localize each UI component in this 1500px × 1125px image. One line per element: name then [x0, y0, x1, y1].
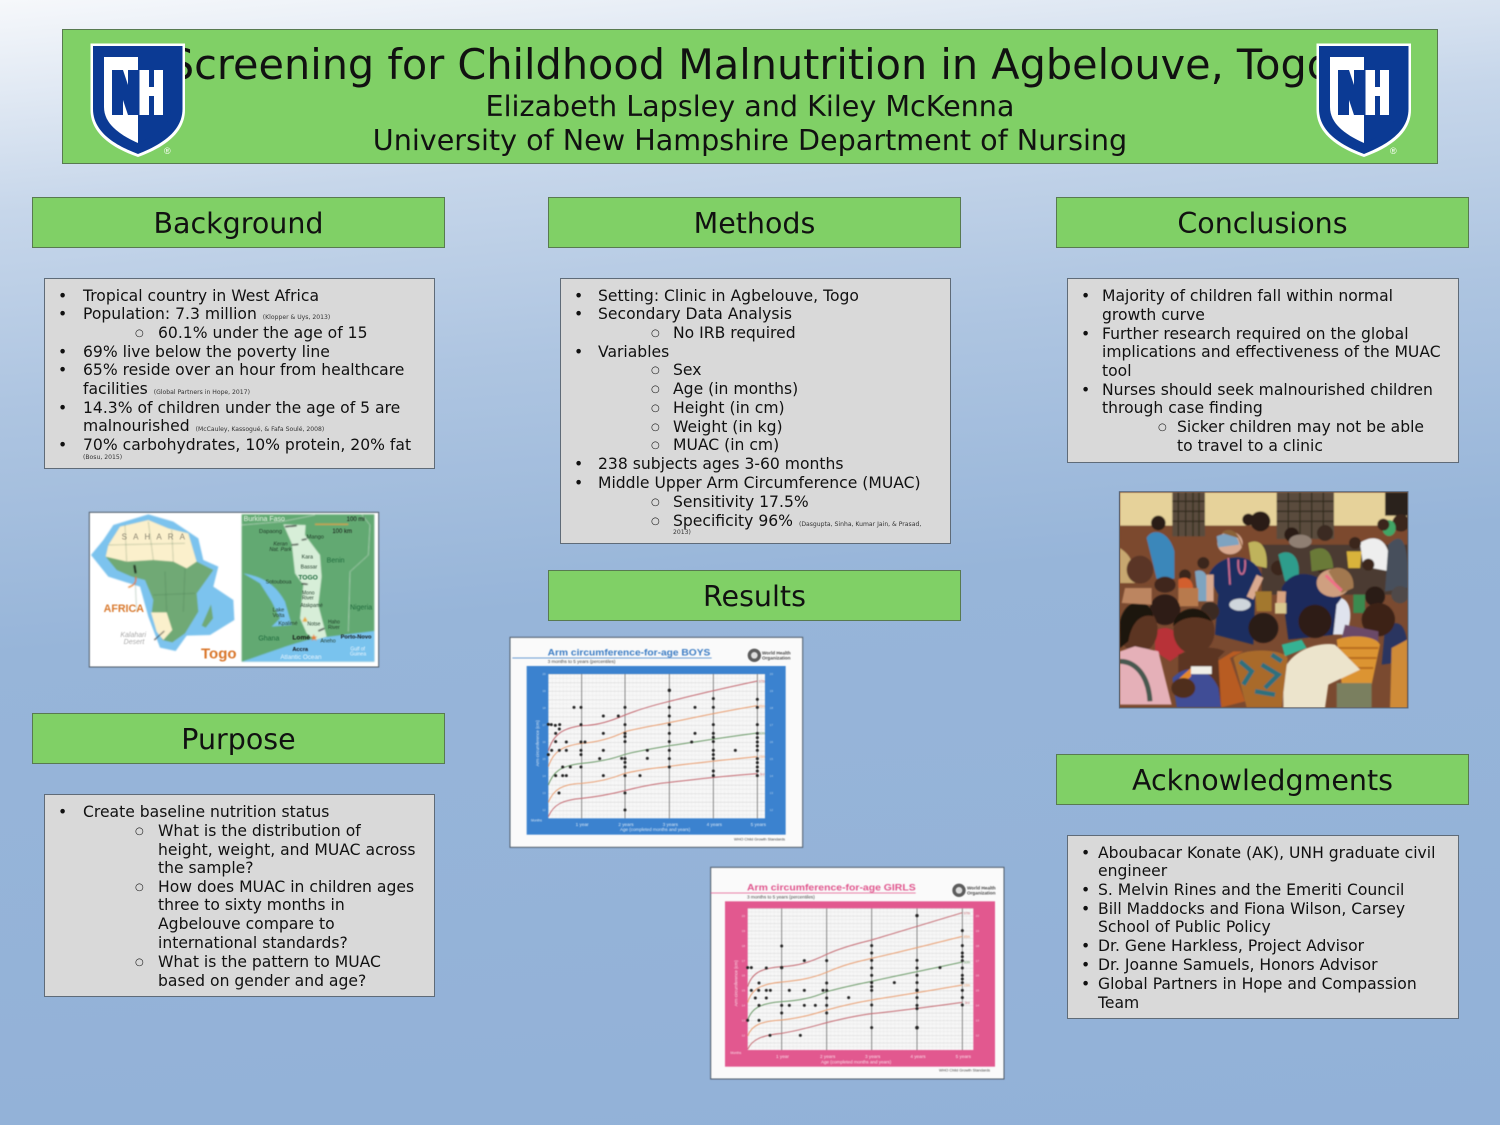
- chart: arm circumference for age, boys: 97th: [759, 680, 765, 684]
- panel: acknowledgments text: Aboubacar Konate (AK), UNH graduate civil: [1098, 844, 1435, 862]
- map labels: Kara: [302, 555, 313, 561]
- chart: arm circumference for age, girls: 14: [976, 1004, 979, 1008]
- icon: UNH shield left: [90, 44, 185, 157]
- panel: methods text: Sensitivity 17.5%: [673, 493, 809, 511]
- heading: Results: Results: [703, 580, 806, 613]
- panel: methods text: Variables: [598, 343, 669, 361]
- heading: Background: [32, 197, 445, 248]
- nurse left: [1208, 557, 1262, 645]
- panel: conclusions text: •: [1081, 325, 1090, 343]
- map labels: Desert: [124, 639, 145, 646]
- chart: arm circumference for age, boys: 13: [770, 791, 773, 795]
- panel: conclusions text: through case finding: [1102, 399, 1263, 417]
- panel: purpose text: the sample?: [158, 859, 254, 877]
- chart: arm circumference for age, girls: 4 years: [910, 1054, 926, 1059]
- panel: acknowledgments text: Global Partners in Hope and Compassion: [1098, 975, 1417, 993]
- header banner: [62, 29, 1438, 164]
- panel: conclusions text: ○: [1158, 422, 1167, 433]
- heading: Conclusions: [1056, 197, 1469, 248]
- chart: arm circumference for age, girls: 17: [742, 959, 745, 963]
- map labels: Mango: [307, 534, 324, 540]
- map labels: SAHARA: [122, 533, 186, 542]
- chart: arm circumference for age, girls: Months: [730, 1051, 742, 1055]
- chart: arm circumference for age, boys: 19: [770, 689, 773, 693]
- panel: acknowledgments text: Dr. Joanne Samuels, Honors Advisor: [1098, 956, 1378, 974]
- icon: UNH shield right: [1316, 44, 1411, 157]
- panel: purpose text: ○: [135, 882, 144, 893]
- chart: arm circumference for age, girls: 12: [742, 1033, 745, 1037]
- chart: arm circumference for age, boys: 18: [542, 706, 546, 710]
- chart: arm circumference for age, boys: 15th: [759, 755, 765, 759]
- heading: Methods: Methods: [694, 207, 815, 240]
- panel: methods text: ○: [651, 328, 660, 339]
- panel: background text: (Bosu, 2015): [83, 454, 122, 461]
- authors: Elizabeth Lapsley and Kiley McKenna: [486, 89, 1014, 123]
- panel: acknowledgments text: [1067, 835, 1459, 1019]
- panel: conclusions text: •: [1081, 287, 1090, 305]
- map labels: Nigeria: [350, 605, 372, 612]
- panel: background text: 60.1% under the age of 15: [158, 324, 368, 342]
- panel: purpose text: •: [58, 803, 67, 821]
- heading: Purpose: [32, 713, 445, 764]
- panel: acknowledgments text: •: [1081, 956, 1090, 974]
- panel: methods text: •: [574, 287, 583, 305]
- panel: background text: Population: 7.3 million (Klopper & Uys, 2013): [83, 305, 330, 323]
- Togo regional map: [242, 514, 374, 662]
- panel: background text: ○: [135, 328, 144, 339]
- chart: arm circumference for age, boys: 3 months to 5 years (percentiles): [548, 659, 616, 664]
- icon: UNH shield right: ®: [1390, 146, 1397, 156]
- chart: arm circumference for age, girls: 13: [976, 1018, 979, 1022]
- panel: purpose text: [44, 794, 435, 997]
- panel: background text: •: [58, 436, 67, 454]
- heading: Conclusions: Conclusions: [1177, 207, 1348, 240]
- chart: arm circumference for age, boys: World Health: [762, 651, 791, 656]
- map labels: AFRICA: [104, 603, 144, 615]
- map labels: Accra: [292, 647, 309, 653]
- chart: arm circumference for age, boys: 17: [770, 723, 773, 727]
- chart: arm circumference for age, boys: Organization: [762, 655, 791, 660]
- background crowd: [1262, 545, 1408, 595]
- heading: Results: [548, 570, 961, 621]
- panel: methods text: Secondary Data Analysis: [598, 305, 792, 323]
- map labels: Gulf of: [350, 646, 366, 652]
- chart: arm circumference for age, boys: 14: [770, 774, 773, 778]
- panel: background text: facilities (Global Partners in Hope, 2017): [83, 380, 250, 398]
- panel: methods text: •: [574, 343, 583, 361]
- sea halo: [91, 514, 234, 651]
- chart: arm circumference for age, boys: Months: [531, 819, 542, 823]
- chart: arm circumference for age, boys: 20: [770, 672, 773, 676]
- chart: arm circumference for age, girls: 17: [976, 959, 979, 963]
- map labels: Aneho: [320, 638, 336, 644]
- chart: arm circumference for age, girls: 85th: [964, 935, 970, 939]
- map labels: 100 km: [332, 529, 352, 535]
- chart: arm circumference for age, boys: WHO Child Growth Standards: [734, 837, 785, 841]
- heading: Acknowledgments: Acknowledgments: [1132, 764, 1393, 797]
- panel: purpose text: three to sixty months in: [158, 896, 345, 914]
- chart: arm circumference for age, boys: 16: [542, 740, 546, 744]
- panel: methods text: ○: [651, 497, 660, 508]
- photo: nurses screening children at the clinic: [1118, 491, 1408, 708]
- chart: arm circumference for age, girls: 50th: [964, 961, 970, 965]
- chart: arm circumference for age, boys: 14: [542, 774, 546, 778]
- panel: methods text: Weight (in kg): [673, 418, 783, 436]
- chart: arm circumference for age, girls: Age (completed months and years): [821, 1059, 892, 1064]
- panel: conclusions text: to travel to a clinic: [1177, 437, 1323, 455]
- panel: methods text: ○: [651, 403, 660, 414]
- panel: acknowledgments text: S. Melvin Rines and the Emeriti Council: [1098, 881, 1404, 899]
- map labels: Mono: [302, 590, 315, 596]
- panel: background text: 69% live below the poverty line: [83, 343, 330, 361]
- chart: arm circumference for age, girls: 13: [742, 1018, 745, 1022]
- map labels: Nat. Park: [269, 547, 292, 553]
- chart: arm circumference for age, boys: 13: [542, 791, 546, 795]
- panel: acknowledgments text: •: [1081, 937, 1090, 955]
- panel: background text: •: [58, 343, 67, 361]
- chart: arm circumference for age, girls: 19: [742, 929, 745, 933]
- chart: arm circumference for age, girls: 3 years: [865, 1054, 881, 1059]
- map labels: Keran: [273, 542, 288, 548]
- chart: arm circumference for age, boys: 4 years: [707, 822, 723, 827]
- panel: acknowledgments text: •: [1081, 881, 1090, 899]
- heading: Background: Background: [153, 207, 324, 240]
- panel: methods text: No IRB required: [673, 324, 796, 342]
- chart: arm circumference for age, boys: 15: [542, 757, 546, 761]
- panel: purpose text: ○: [135, 957, 144, 968]
- panel: background text: malnourished (McCauley, Kassogué, & Fafa Soulé, 2008): [83, 417, 324, 435]
- chart: arm circumference for age, girls: 14: [742, 1004, 745, 1008]
- chart: arm circumference for age, girls: World Health: [967, 886, 996, 891]
- chart: arm circumference for age, boys: 1 year: [576, 822, 589, 827]
- panel: conclusions text: tool: [1102, 362, 1132, 380]
- panel: background text: •: [58, 361, 67, 379]
- chart: arm circumference for age, girls: 12: [976, 1033, 979, 1037]
- chart: arm circumference for age, boys: 3 years: [663, 822, 679, 827]
- chart: arm circumference for age, boys: 15: [770, 757, 773, 761]
- panel: methods text: ○: [651, 440, 660, 451]
- panel: acknowledgments text: engineer: [1098, 862, 1167, 880]
- chart: arm circumference for age, girls: Arm circumference-for-age GIRLS: [747, 883, 916, 893]
- map labels: Volta: [273, 613, 285, 619]
- panel: methods text: Height (in cm): [673, 399, 785, 417]
- panel: methods text: [560, 278, 951, 544]
- chart: arm circumference for age, girls: 97th: [964, 911, 970, 915]
- map labels: Guinea: [350, 652, 366, 658]
- panel: methods text: Setting: Clinic in Agbelouve, Togo: [598, 287, 859, 305]
- panel: background text: [44, 278, 435, 469]
- chart: arm circumference for age, girls: 19: [976, 929, 979, 933]
- panel: purpose text: What is the distribution of: [158, 822, 361, 840]
- chart: arm circumference for age, boys: 12: [542, 808, 546, 812]
- chart: arm circumference for age, girls: WHO Child Growth Standards: [939, 1069, 990, 1073]
- chart: arm circumference for age, boys: 3rd: [760, 772, 765, 776]
- map labels: Dapaong: [259, 529, 282, 535]
- panel: conclusions text: Majority of children fall within normal: [1102, 287, 1393, 305]
- map labels: Kalahari: [120, 632, 146, 639]
- map labels: Burkina Faso: [244, 516, 285, 523]
- panel: methods text: Sex: [673, 361, 701, 379]
- chart: arm circumference for age, boys: Arm circumference (cm): [535, 720, 540, 766]
- chart: arm circumference for age, boys: 20: [542, 672, 546, 676]
- chart: arm circumference for age, girls: Arm circumference (cm): [733, 960, 738, 1006]
- panel: purpose text: How does MUAC in children ages: [158, 878, 414, 896]
- title: Screening for Childhood Malnutrition in Agbelouve, Togo: [168, 41, 1332, 89]
- map labels: Togo: [201, 645, 237, 662]
- chart: arm circumference for age, boys: 18: [770, 706, 773, 710]
- chart: arm circumference for age, boys: 85th: [759, 705, 765, 709]
- chart: arm circumference for age, boys: 5 years: [751, 822, 767, 827]
- chart: arm circumference for age, boys: Arm circumference-for-age BOYS: [548, 647, 710, 657]
- panel: methods text: 2013): [673, 529, 691, 536]
- heading: Methods: [548, 197, 961, 248]
- panel: methods text: •: [574, 455, 583, 473]
- heading: Acknowledgments: [1056, 754, 1469, 805]
- chart: arm circumference for age, boys: 19: [542, 689, 546, 693]
- panel: purpose text: height, weight, and MUAC across: [158, 841, 416, 859]
- chart: arm circumference for age, girls: 15: [976, 989, 979, 993]
- map labels: Atlantic Ocean: [280, 654, 322, 661]
- panel: methods text: ○: [651, 365, 660, 376]
- panel: methods text: •: [574, 305, 583, 323]
- icon: UNH shield left: ®: [164, 146, 171, 156]
- map labels: Benin: [327, 557, 345, 564]
- panel: methods text: Age (in months): [673, 380, 798, 398]
- panel: conclusions text: [1067, 278, 1459, 463]
- panel: acknowledgments text: •: [1081, 975, 1090, 993]
- panel: conclusions text: Sicker children may not be able: [1177, 418, 1424, 436]
- panel: methods text: ○: [651, 516, 660, 527]
- chart: arm circumference for age, girls: 3 months to 5 years (percentiles): [747, 894, 815, 899]
- map labels: River: [328, 625, 340, 631]
- panel: acknowledgments text: •: [1081, 900, 1090, 918]
- chart: arm circumference for age, girls: 15th: [964, 984, 970, 988]
- panel: methods text: •: [574, 474, 583, 492]
- panel: conclusions text: •: [1081, 381, 1090, 399]
- panel: acknowledgments text: Team: [1098, 994, 1139, 1012]
- panel: background text: •: [58, 399, 67, 417]
- chart: arm circumference for age, boys: Age (completed months and years): [620, 827, 691, 832]
- panel: purpose text: Create baseline nutrition status: [83, 803, 329, 821]
- panel: purpose text: What is the pattern to MUAC: [158, 953, 381, 971]
- chart: arm circumference for age, girls: 18: [742, 944, 745, 948]
- map labels: [104, 516, 372, 662]
- map labels: Lake: [273, 608, 284, 614]
- map labels: TOGO: [298, 575, 318, 582]
- chart: arm circumference for age, girls: 18: [976, 944, 979, 948]
- map labels: Sotouboua: [266, 580, 291, 586]
- chart: arm circumference for age, girls: 1 year: [776, 1054, 789, 1059]
- panel: background text: 70% carbohydrates, 10% protein, 20% fat: [83, 436, 411, 454]
- panel: methods text: Middle Upper Arm Circumference (MUAC): [598, 474, 921, 492]
- chart: arm circumference for age, girls: 20: [976, 914, 979, 918]
- heading: Purpose: Purpose: [181, 723, 296, 756]
- map labels: Bassar: [301, 565, 317, 571]
- map labels: Notse: [307, 622, 321, 628]
- panel: acknowledgments text: •: [1081, 844, 1090, 862]
- panel: methods text: ○: [651, 384, 660, 395]
- panel: conclusions text: Nurses should seek malnourished children: [1102, 381, 1433, 399]
- panel: purpose text: based on gender and age?: [158, 972, 366, 990]
- panel: acknowledgments text: Dr. Gene Harkless, Project Advisor: [1098, 937, 1364, 955]
- chart: arm circumference for age, boys: 2 years: [618, 822, 634, 827]
- front children: [1337, 636, 1380, 685]
- panel: methods text: ○: [651, 422, 660, 433]
- panel: background text: 14.3% of children under the age of 5 are: [83, 399, 400, 417]
- panel: purpose text: Agbelouve compare to: [158, 915, 335, 933]
- map labels: River: [302, 595, 314, 601]
- chart: arm circumference for age, girls: [710, 866, 1006, 1080]
- chart: arm circumference for age, boys: 17: [542, 723, 546, 727]
- Africa: [106, 520, 213, 642]
- nurse right: [1282, 574, 1342, 640]
- panel: conclusions text: Further research required on the global: [1102, 325, 1409, 343]
- panel: acknowledgments text: Bill Maddocks and Fiona Wilson, Carsey: [1098, 900, 1405, 918]
- map of Africa and Togo: [88, 511, 380, 668]
- chart: arm circumference for age, girls: 15: [742, 989, 745, 993]
- chart: arm circumference for age, girls: Organization: [967, 890, 996, 895]
- map labels: 100 mi: [347, 517, 365, 523]
- right-side children: [1365, 586, 1385, 606]
- map labels: Lomé: [292, 635, 310, 642]
- map labels: Kpalimé: [278, 621, 298, 627]
- chart: arm circumference for age, boys: 12: [770, 808, 773, 812]
- panel: conclusions text: growth curve: [1102, 306, 1205, 324]
- map labels: Ghana: [258, 635, 279, 642]
- panel: acknowledgments text: School of Public Policy: [1098, 918, 1271, 936]
- chart: arm circumference for age, boys: [508, 636, 804, 848]
- chart: arm circumference for age, girls: 16: [742, 974, 745, 978]
- chart: arm circumference for age, boys: 50th: [759, 731, 765, 735]
- panel: methods text: Specificity 96% (Dasgupta, Sinha, Kumar Jain, & Prasad,: [673, 512, 921, 530]
- affiliation: University of New Hampshire Department of Nursing: [373, 123, 1127, 157]
- panel: background text: •: [58, 305, 67, 323]
- panel: background text: Tropical country in West Africa: [83, 287, 319, 305]
- panel: background text: •: [58, 287, 67, 305]
- panel: conclusions text: implications and effectiveness of the MUAC: [1102, 343, 1441, 361]
- chart: arm circumference for age, girls: 2 years: [820, 1054, 836, 1059]
- panel: purpose text: international standards?: [158, 934, 348, 952]
- chart: arm circumference for age, girls: 3rd: [965, 1001, 970, 1005]
- panel: methods text: MUAC (in cm): [673, 436, 779, 454]
- chart: arm circumference for age, boys: 16: [770, 740, 773, 744]
- chart: arm circumference for age, girls: 20: [742, 914, 745, 918]
- panel: purpose text: ○: [135, 826, 144, 837]
- chart: arm circumference for age, girls: 16: [976, 974, 979, 978]
- panel: background text: 65% reside over an hour from healthcare: [83, 361, 404, 379]
- map labels: Atakpamé: [300, 603, 323, 609]
- map labels: Haho: [328, 620, 340, 626]
- map labels: Porto-Novo: [341, 634, 372, 640]
- panel: methods text: 238 subjects ages 3-60 months: [598, 455, 844, 473]
- chart: arm circumference for age, girls: 5 years: [956, 1054, 972, 1059]
